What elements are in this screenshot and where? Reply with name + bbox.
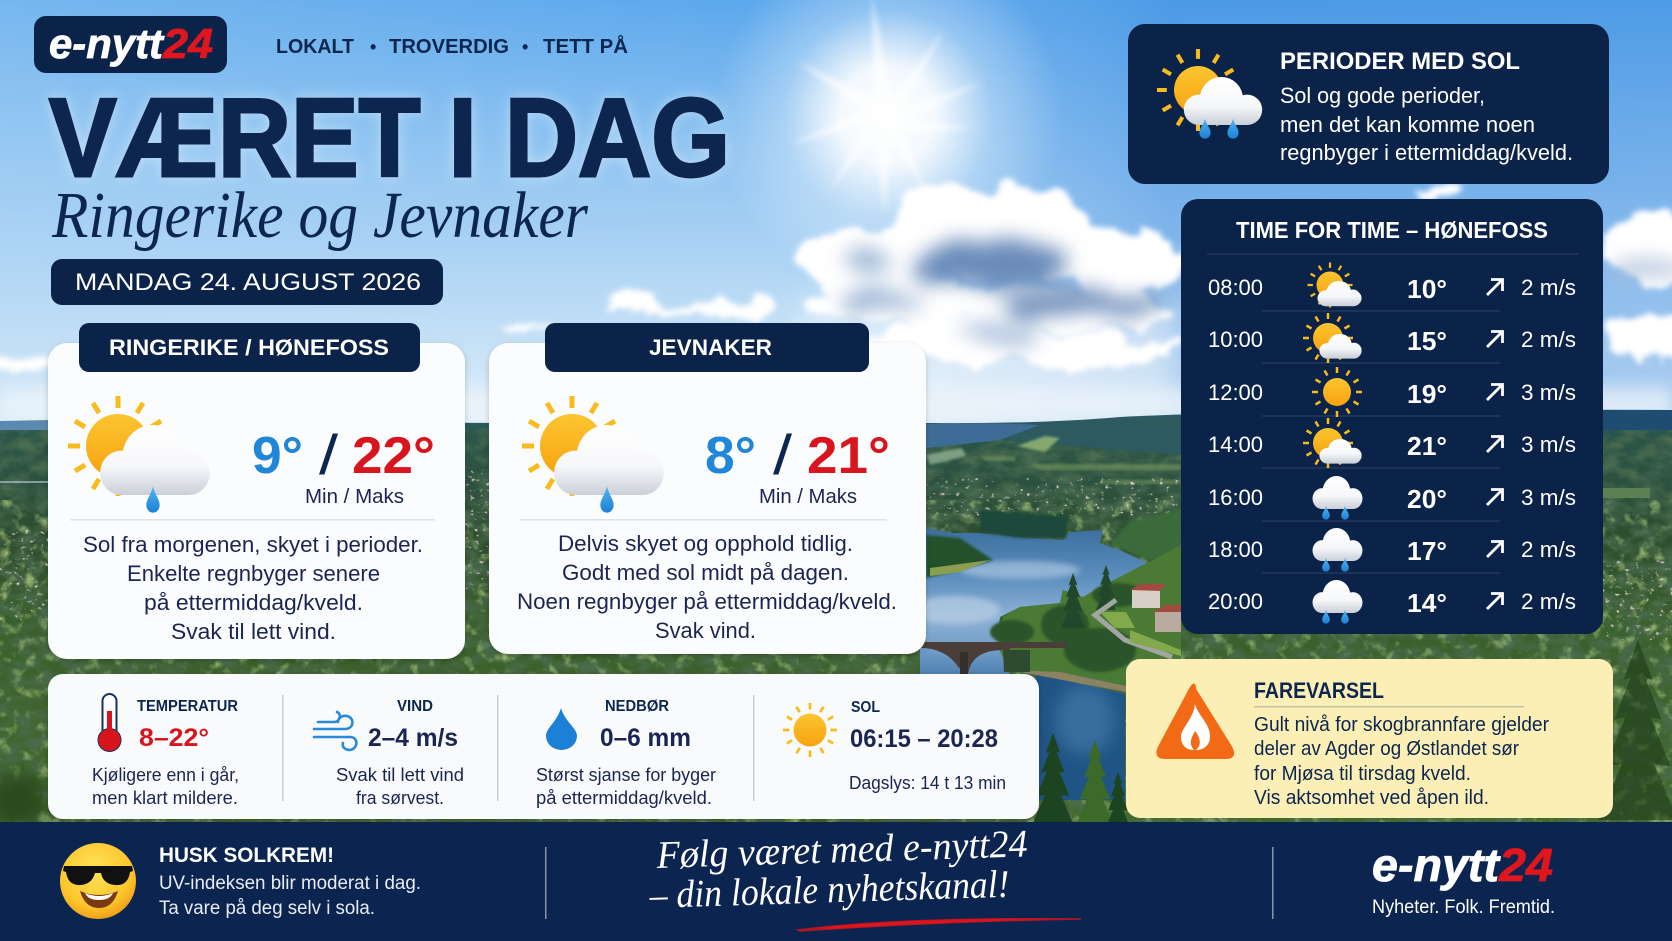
description: Svak til lett vind. — [171, 619, 336, 644]
description — [1280, 83, 1573, 165]
stat: nedbør: NEDBØR — [605, 698, 669, 715]
row 08:00: 2 m/s — [1521, 275, 1576, 300]
date badge — [51, 259, 443, 305]
panel: farevarsel: deler av Agder og Østlandet sør — [1254, 738, 1519, 760]
stat: sol: 06:15 – 20:28 — [850, 725, 998, 753]
sunscreen reminder — [159, 844, 421, 919]
footer band — [0, 822, 1672, 941]
slogan — [648, 822, 1081, 931]
pines — [1033, 640, 1672, 827]
row 20:00: 2 m/s — [1521, 589, 1576, 614]
far hills — [926, 423, 1040, 448]
stat: sol: Dagslys: 14 t 13 min — [849, 773, 1006, 793]
sunscreen reminder: Ta vare på deg selv i sola. — [159, 898, 375, 919]
icon: sun, cloud and rain — [68, 396, 210, 513]
row 10:00: 10:00 — [1208, 327, 1263, 352]
panel: summary stats — [48, 674, 1039, 819]
icon: sun — [783, 703, 837, 757]
panel: Jevnaker — [489, 323, 926, 654]
footer logo — [1372, 839, 1555, 918]
row 12:00: 3 m/s — [1521, 380, 1576, 405]
stat: temperatur: men klart mildere. — [92, 788, 238, 808]
row 08:00 — [1208, 262, 1576, 308]
panel: perioder med sol — [1128, 24, 1609, 184]
row 18:00: 17° — [1407, 536, 1447, 566]
row 16:00: 16:00 — [1208, 485, 1263, 510]
panel: Ringerike / Hønefoss — [48, 323, 465, 659]
sunscreen reminder: HUSK SOLKREM! — [159, 844, 334, 867]
row 18:00 — [1208, 528, 1576, 572]
row 18:00: 18:00 — [1208, 537, 1263, 562]
row 12:00: 19° — [1407, 379, 1447, 409]
stat: vind: Svak til lett vind — [336, 765, 464, 785]
row 14:00 — [1208, 418, 1576, 468]
row 16:00: 20° — [1407, 484, 1447, 514]
clouds — [0, 182, 1672, 424]
tagline: • — [370, 37, 376, 57]
logo badge: 24 — [162, 20, 213, 67]
stat: nedbør: Størst sjanse for byger — [536, 765, 716, 785]
row 10:00: 2 m/s — [1521, 327, 1576, 352]
icon: thermometer — [98, 694, 121, 752]
row 16:00: 3 m/s — [1521, 485, 1576, 510]
row 14:00: 3 m/s — [1521, 432, 1576, 457]
description: Sol og gode perioder, — [1280, 83, 1485, 108]
tagline — [276, 34, 628, 58]
logo badge — [34, 16, 227, 73]
stat: sol: SOL — [851, 699, 880, 716]
footer logo: Nyheter. Folk. Fremtid. — [1372, 897, 1555, 918]
temperature min max — [252, 423, 435, 508]
date badge: MANDAG 24. AUGUST 2026 — [75, 269, 421, 296]
row 14:00: 14:00 — [1208, 432, 1263, 457]
row 10:00 — [1208, 313, 1576, 363]
houses — [0, 470, 1672, 640]
slogan: Følg været med e-nytt24 — [655, 822, 1028, 877]
row 12:00 — [1208, 367, 1576, 417]
icon: sunglasses emoji — [60, 843, 136, 919]
footer logo: e-nytt — [1372, 839, 1501, 891]
stat: vind: 2–4 m/s — [368, 724, 458, 752]
heading: Jevnaker — [545, 323, 869, 372]
description: Delvis skyet og opphold tidlig. — [558, 531, 853, 556]
temperature min max — [705, 423, 890, 508]
row 18:00: 2 m/s — [1521, 537, 1576, 562]
panel: farevarsel: Vis aktsomhet ved åpen ild. — [1254, 787, 1489, 809]
tagline: TROVERDIG — [389, 36, 509, 58]
temperature min max: 22° — [352, 427, 435, 485]
stat: temperatur: 8–22° — [139, 724, 209, 752]
row 12:00: 12:00 — [1208, 380, 1263, 405]
row 16:00 — [1208, 476, 1576, 520]
heading: PERIODER MED SOL — [1280, 48, 1520, 75]
subtitle: Ringerike og Jevnaker — [51, 179, 588, 252]
icon: sun in the sky — [713, 0, 1063, 290]
temperature min max: / — [319, 423, 339, 486]
heading: Ringerike / Hønefoss: RINGERIKE / HØNEFOSS — [109, 335, 389, 360]
heading: TIME FOR TIME – HØNEFOSS — [1236, 217, 1548, 243]
sunscreen reminder: UV-indeksen blir moderat i dag. — [159, 873, 421, 894]
houses by the lake — [1130, 584, 1181, 632]
temperature min max: / — [773, 423, 793, 486]
description: men det kan komme noen — [1280, 112, 1535, 137]
row 20:00: 20:00 — [1208, 589, 1263, 614]
south shore — [997, 545, 1181, 690]
landscape — [0, 410, 1672, 828]
panel: farevarsel: Gult nivå for skogbrannfare gjelder — [1254, 714, 1549, 736]
temperature min max: Min / Maks — [759, 486, 857, 508]
description: Enkelte regnbyger senere — [127, 561, 380, 586]
description: Svak vind. — [655, 618, 756, 643]
description: Noen regnbyger på ettermiddag/kveld. — [517, 589, 897, 614]
logo badge: e-nytt — [49, 20, 165, 67]
tagline: LOKALT — [276, 36, 354, 58]
temperature min max: 8° — [705, 427, 756, 485]
row 08:00: 10° — [1407, 274, 1447, 304]
row 08:00: 08:00 — [1208, 275, 1263, 300]
stat: temperatur: Kjøligere enn i går, — [92, 765, 239, 785]
heading: Jevnaker: JEVNAKER — [649, 335, 772, 360]
icon: sun, cloud and rain — [522, 396, 664, 513]
panel: farevarsel: FAREVARSEL — [1254, 678, 1384, 703]
description: Sol fra morgenen, skyet i perioder. — [83, 532, 423, 557]
panel: time for time — [1181, 199, 1603, 634]
heading: Ringerike / Hønefoss — [79, 323, 420, 372]
stat: nedbør — [536, 698, 716, 808]
temperature min max: 21° — [807, 427, 890, 485]
stat: nedbør: 0–6 mm — [600, 724, 691, 752]
lake — [920, 527, 1147, 674]
row 20:00 — [1208, 580, 1576, 624]
temperature min max: Min / Maks — [305, 486, 404, 508]
description — [83, 532, 423, 644]
icon: sun and rain cloud — [1157, 49, 1262, 139]
stat: vind: VIND — [397, 698, 433, 715]
stat: vind — [314, 698, 464, 808]
title: VÆRET I DAG — [49, 76, 730, 200]
stat: temperatur: TEMPERATUR — [137, 698, 238, 715]
row 14:00: 21° — [1407, 431, 1447, 461]
row 10:00: 15° — [1407, 326, 1447, 356]
stat: nedbør: på ettermiddag/kveld. — [536, 788, 712, 808]
description — [517, 531, 897, 643]
stat: vind: fra sørvest. — [356, 788, 444, 808]
stat: temperatur — [92, 694, 239, 808]
fields — [1017, 436, 1060, 452]
stat: sol — [783, 699, 1006, 793]
icon: fire warning triangle — [1157, 684, 1233, 758]
description: på ettermiddag/kveld. — [144, 590, 363, 615]
description: regnbyger i ettermiddag/kveld. — [1280, 140, 1573, 165]
tagline: TETT PÅ — [543, 34, 628, 58]
slogan: – din lokale nyhetskanal! — [648, 863, 1010, 917]
icon: water drop — [546, 708, 577, 750]
panel: farevarsel — [1126, 659, 1613, 818]
row 20:00: 14° — [1407, 588, 1447, 618]
panel: farevarsel: for Mjøsa til tirsdag kveld. — [1254, 763, 1471, 785]
description: Godt med sol midt på dagen. — [562, 560, 849, 585]
water below the bridge — [1010, 670, 1126, 800]
bridge — [915, 642, 1067, 674]
tagline: • — [522, 37, 528, 57]
temperature min max: 9° — [252, 427, 303, 485]
footer logo: 24 — [1498, 839, 1553, 891]
icon: wind — [314, 712, 356, 750]
